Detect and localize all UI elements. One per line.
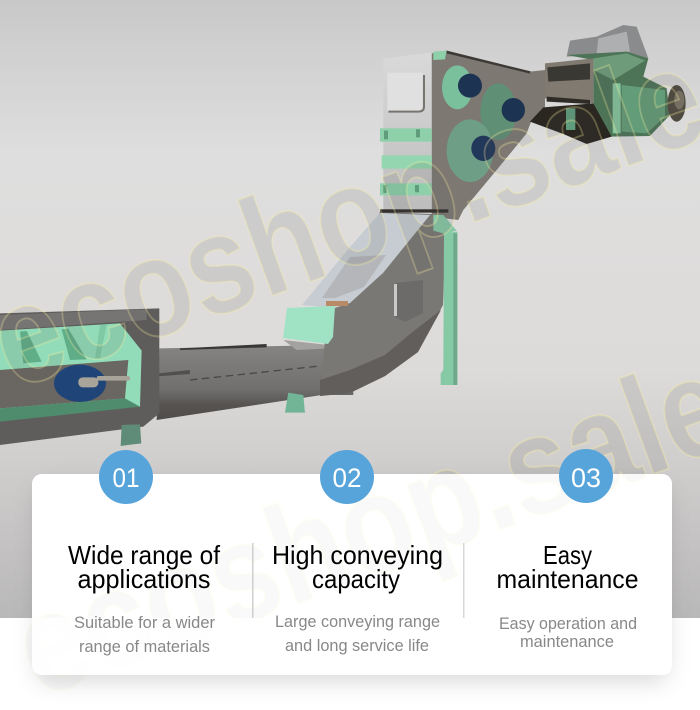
feature 1 text: Suitable for a wider: [74, 613, 215, 632]
lower conveyor: [0, 308, 353, 446]
card shadow: [36, 484, 668, 682]
feature 1 text: applications: [78, 564, 210, 594]
green hopper section: [0, 323, 142, 415]
number badge 02: [320, 450, 374, 504]
green bands: [380, 128, 432, 142]
feature 3 text: [496, 540, 638, 651]
conveyor beam: [157, 345, 353, 420]
white veil over lower band: [0, 618, 700, 710]
blue hub and shaft: [54, 365, 130, 402]
upper housing: [380, 51, 543, 385]
silver side panel: [383, 53, 432, 211]
feature 2 text: capacity: [312, 564, 400, 594]
chute section joining lower conveyor: [302, 212, 446, 396]
feature 3 text: maintenance: [496, 564, 638, 594]
feature 1 text: Wide range of: [68, 540, 221, 570]
white lower band: [0, 618, 700, 710]
card base: [32, 474, 672, 675]
support leg: [433, 215, 457, 385]
number badge 03: [559, 449, 613, 503]
left conveyor frame: [0, 308, 159, 445]
feature 2 text: and long service life: [285, 636, 429, 655]
feature 2 text: Large conveying range: [275, 612, 440, 631]
number badge 02: 02: [332, 463, 362, 493]
number badge 01: [99, 450, 153, 504]
feature 2 text: [272, 540, 443, 655]
conveyor machine illustration: [0, 25, 686, 446]
number badge 01: 01: [112, 463, 140, 493]
support feet: [121, 393, 305, 446]
sprocket wheels: [442, 65, 525, 182]
feature 3 text: maintenance: [520, 632, 614, 651]
green transition box: [283, 301, 348, 344]
feature 1 text: [68, 540, 221, 656]
feature 1 text: range of materials: [79, 637, 210, 656]
number badge 03: 03: [571, 463, 601, 493]
feature 3 text: Easy: [543, 540, 592, 570]
drive head: [530, 25, 686, 144]
feature 2 text: High conveying: [272, 540, 443, 570]
feature 3 text: Easy operation and: [499, 614, 637, 633]
white veil over card: [32, 474, 672, 675]
